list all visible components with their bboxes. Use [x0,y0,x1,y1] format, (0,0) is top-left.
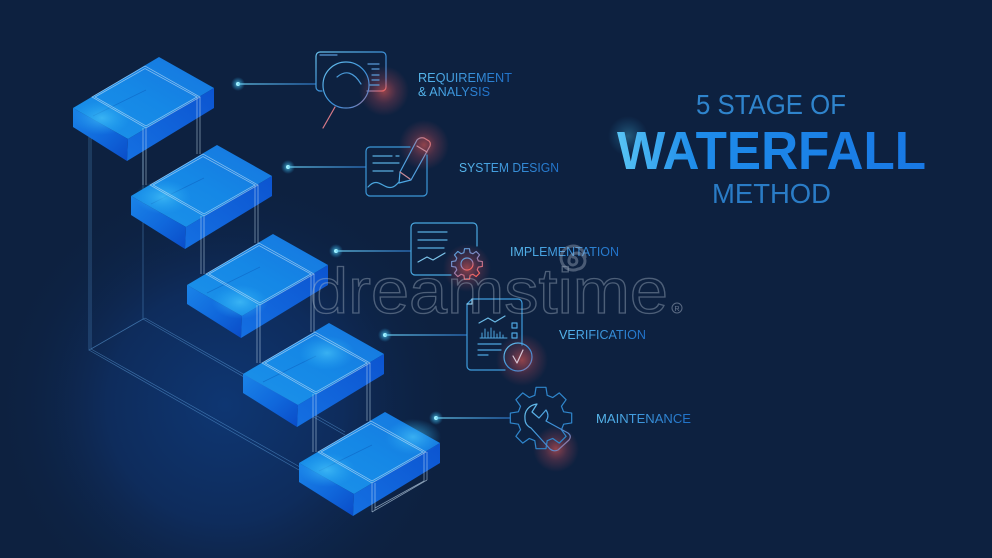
label: maintenance: MAINTENANCE [596,411,691,426]
label: implementation: IMPLEMENTATION [510,244,619,259]
stacked waterfall blocks [73,57,441,516]
block 4 [243,323,384,427]
wireframe: back frame lines [89,135,345,470]
block 2 [131,145,272,249]
title: 5 STAGE OF [696,89,846,120]
connector 5 [429,411,510,425]
title [608,89,926,209]
block 3 [187,234,328,338]
connector 1 [231,77,316,91]
connector 2 [281,160,366,174]
label: requirement & analysis: & ANALYSIS [418,84,490,99]
label: requirement & analysis: REQUIREMENT [418,70,512,85]
icon: verification document [467,299,548,386]
wireframe: frames and verticals over blocks [92,66,427,512]
title: METHOD [712,178,831,209]
icon: implementation gear [411,223,491,292]
connector 4 [378,328,467,342]
label: verification: VERIFICATION [559,327,646,342]
icon: system design pencil [366,120,449,196]
watermark: dreamstime [310,255,668,327]
block 5 [299,412,441,516]
icon: maintenance gear and wrench [510,387,579,472]
label: requirement & analysis [418,70,512,99]
icon: requirement magnifier [316,52,409,128]
block 1 [73,57,214,161]
connector 3 [329,244,411,258]
title: WATERFALL [617,121,926,181]
watermark: R [674,306,680,313]
label: system design: SYSTEM DESIGN [459,160,559,175]
